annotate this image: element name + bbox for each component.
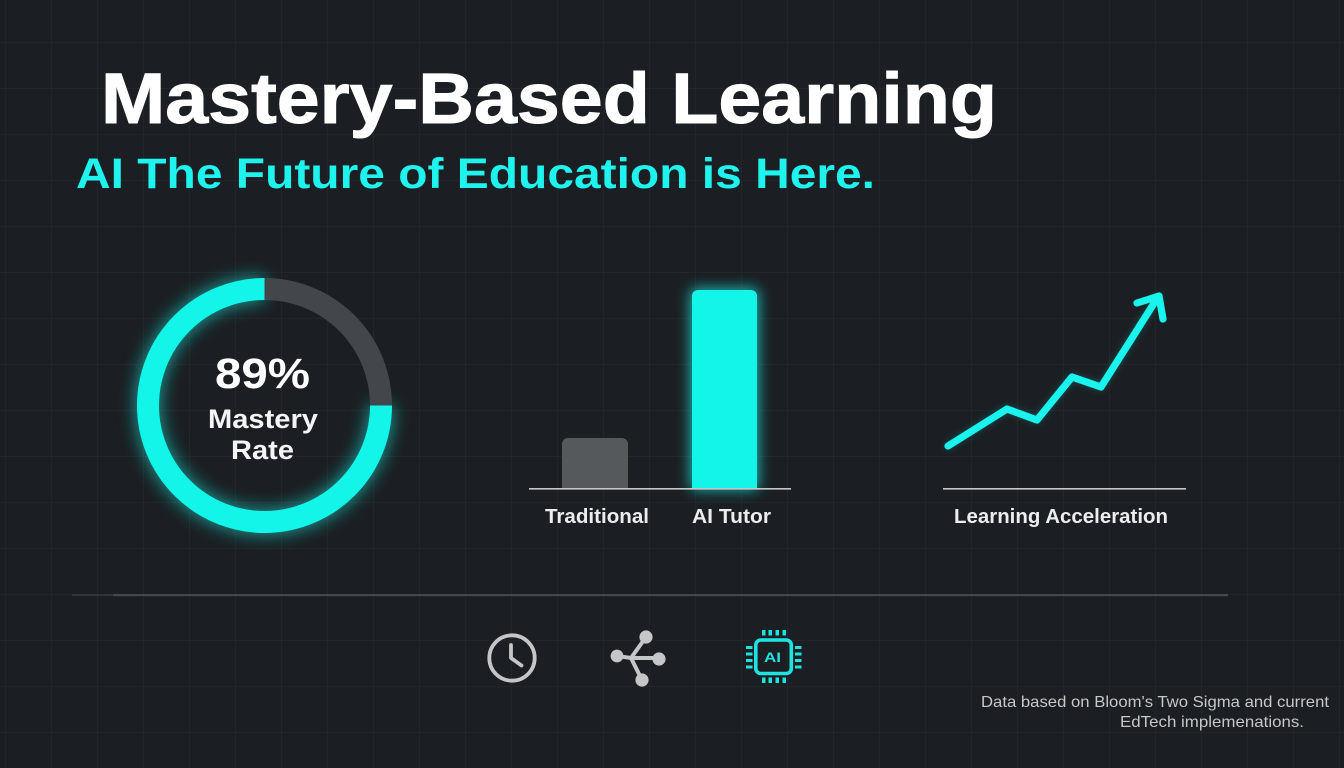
subtitle: AI The Future of Education is Here.	[76, 150, 875, 198]
bar: AI tutor	[692, 290, 757, 488]
label: traditional: Traditional	[545, 506, 649, 528]
title: Mastery-Based Learning	[101, 60, 997, 139]
bar: traditional	[562, 438, 628, 488]
footnote: EdTech implemenations.	[1120, 714, 1304, 731]
icon: network share	[611, 630, 666, 687]
donut label: Rate	[231, 435, 294, 465]
arrow: rising trend	[948, 296, 1163, 446]
icon: clock	[489, 635, 535, 681]
donut chart: 89% mastery rate	[148, 289, 381, 522]
donut label: Mastery	[208, 404, 318, 434]
label: AI tutor: AI Tutor	[692, 506, 771, 528]
footnote: Data based on Bloom's Two Sigma and current	[981, 694, 1330, 711]
icon: AI chip	[746, 630, 802, 683]
icon: AI chip: AI	[764, 649, 781, 665]
donut value: 89%	[215, 350, 310, 398]
bar chart: traditional vs AI tutor	[529, 288, 791, 528]
label: learning acceleration: Learning Acceleration	[954, 506, 1168, 528]
line chart: learning acceleration	[943, 296, 1186, 528]
